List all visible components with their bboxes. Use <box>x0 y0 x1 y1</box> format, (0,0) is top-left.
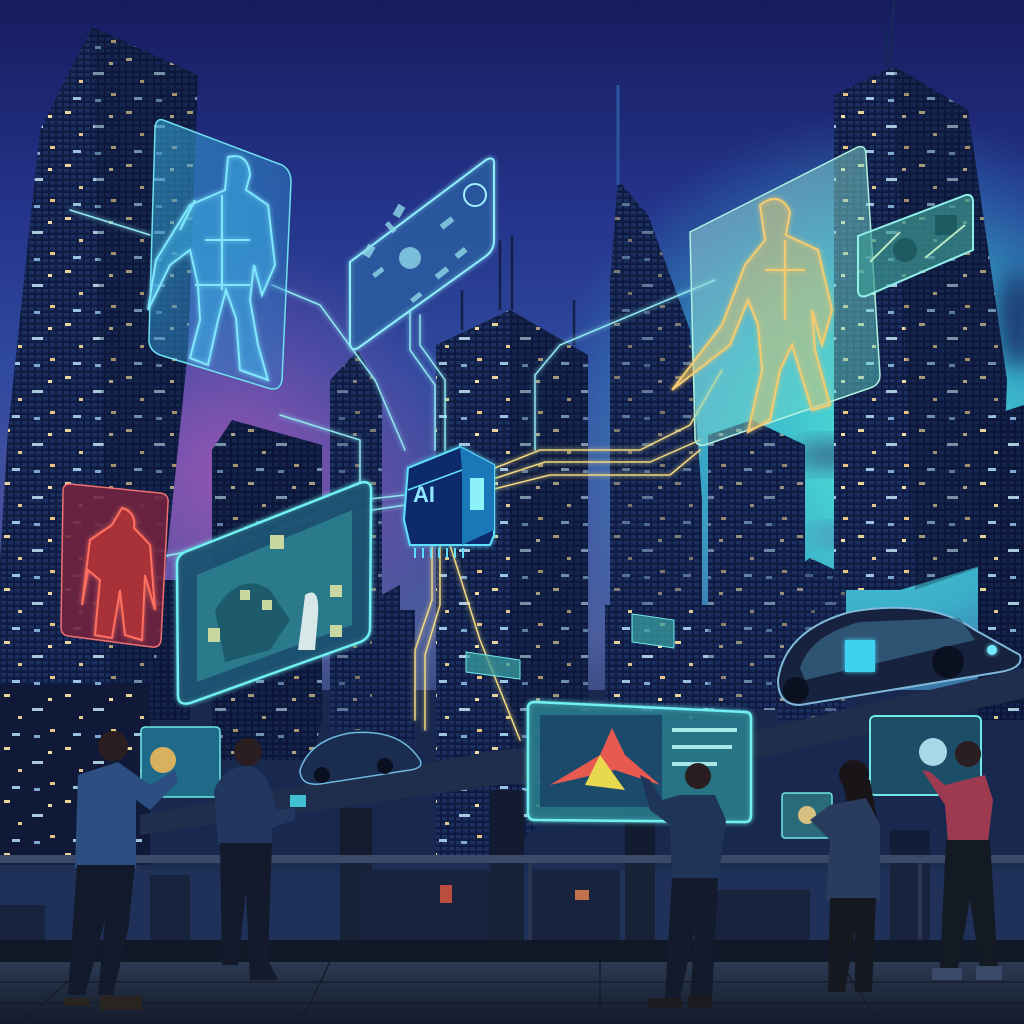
hologram: game screen centre <box>528 702 751 822</box>
hologram: blue armoured knight <box>148 120 291 389</box>
hologram: globe panel <box>870 716 981 795</box>
person 4 <box>810 760 880 992</box>
small floating tags <box>466 614 674 679</box>
hologram: gold warrior <box>672 147 880 445</box>
tower: right tall <box>834 0 1007 590</box>
flying car left <box>300 732 421 784</box>
data lines <box>70 210 722 740</box>
tower: far left tall <box>0 27 198 865</box>
terrace floor <box>0 962 1024 1024</box>
person 3 <box>640 763 726 1008</box>
hologram: small panels <box>141 727 832 838</box>
distant skyline <box>140 350 1024 870</box>
tower: right middle <box>708 420 805 710</box>
hologram: red warrior <box>61 484 168 647</box>
person 2 <box>214 738 306 980</box>
hologram: small map top right <box>858 195 973 296</box>
hologram: game map panel <box>177 482 371 704</box>
AI chip <box>404 447 494 558</box>
tower: centre <box>436 236 588 860</box>
tower: left mid <box>212 420 322 760</box>
pod car right <box>778 608 1021 705</box>
tower: centre right spire <box>610 85 702 640</box>
elevated road <box>140 668 1024 940</box>
glass balcony railing <box>0 855 1024 963</box>
city below road <box>0 830 930 940</box>
hologram: circuit panel <box>350 158 494 349</box>
tower: right edge <box>978 405 1024 720</box>
person 1 <box>64 731 178 1010</box>
AI chip: AI <box>413 482 435 507</box>
person 5 <box>922 741 1002 980</box>
